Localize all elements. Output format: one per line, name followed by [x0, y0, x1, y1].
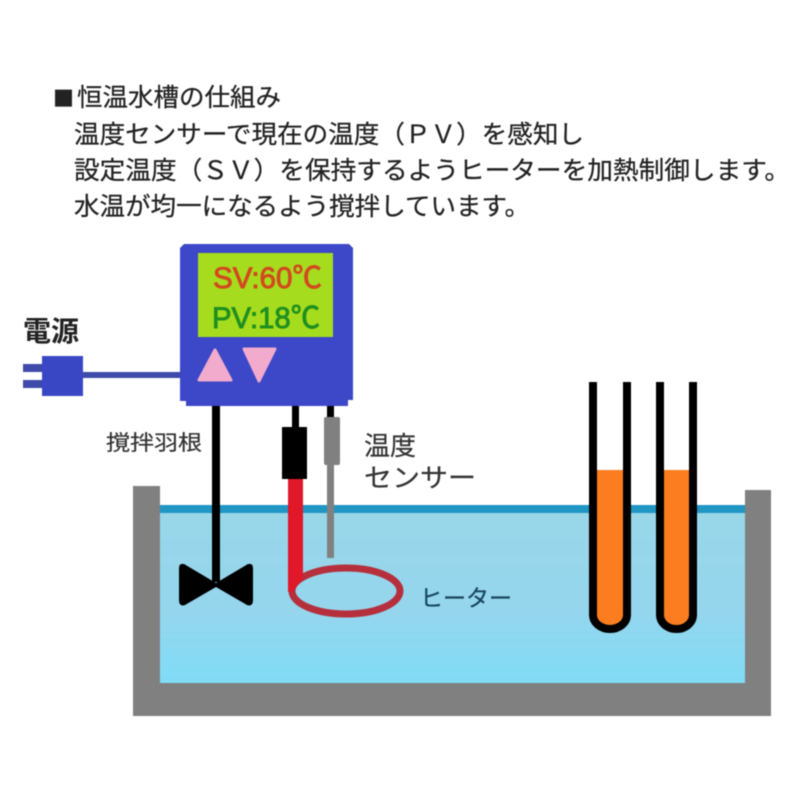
PV reading: PV:18℃	[212, 302, 320, 335]
SV reading: SV:60℃	[213, 262, 322, 295]
water surface	[160, 505, 745, 513]
stirrer label: 撹拌羽根	[106, 427, 202, 457]
heater label: ヒーター	[420, 579, 512, 613]
heater tube	[288, 478, 303, 592]
down button	[244, 349, 275, 381]
water	[160, 506, 745, 684]
heading and description text	[53, 78, 790, 223]
controller	[180, 244, 353, 406]
description line 3: 水温が均一になるよう撹拌しています。	[74, 187, 530, 223]
water tank	[133, 486, 771, 716]
stirrer shaft and impeller	[179, 404, 253, 605]
heading marker: ■	[53, 83, 74, 113]
display	[198, 253, 333, 337]
test tubes	[593, 382, 693, 629]
description line 1: 温度センサーで現在の温度（ＰＶ）を感知し	[74, 115, 584, 151]
heater connector	[282, 427, 307, 479]
sensor label: 温度	[364, 426, 416, 463]
heater	[282, 404, 400, 614]
controller body	[180, 244, 353, 406]
sensor label: センサー	[364, 458, 476, 495]
heater coil	[292, 568, 400, 614]
sensor label	[364, 426, 476, 495]
power label: 電源	[23, 310, 79, 350]
heading: 恒温水槽の仕組み	[77, 78, 281, 114]
power plug and cord	[23, 356, 183, 396]
description line 2: 設定温度（ＳＶ）を保持するようヒーターを加熱制御します。	[74, 151, 790, 187]
test tube 1	[593, 382, 627, 629]
up button	[199, 350, 231, 380]
test tube 2	[660, 382, 693, 629]
heater lead	[292, 404, 299, 430]
temperature sensor	[324, 404, 340, 558]
tank wall	[133, 486, 771, 716]
